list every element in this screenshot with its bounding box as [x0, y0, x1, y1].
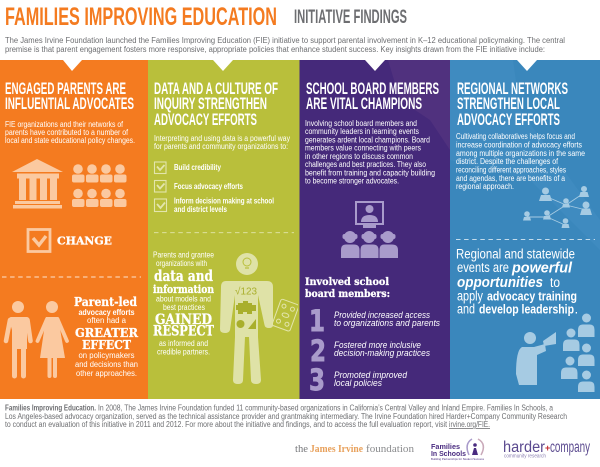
heading: data and inquiry — [154, 80, 278, 129]
list: numbered outcomes: 1 — [309, 304, 325, 338]
list: numbered outcomes — [309, 304, 440, 397]
text block: parent-led: on policymakers — [78, 351, 135, 360]
text block: parent-led: and decisions than — [75, 360, 138, 369]
text block: local champions: members value connecting with peers — [305, 144, 421, 152]
text block: powerful opportunities: events are — [457, 260, 509, 275]
heading: school board members — [306, 80, 439, 113]
list: numbered outcomes: local policies — [334, 378, 382, 388]
intro text — [5, 36, 565, 54]
icon: speaker with megaphone — [516, 332, 556, 385]
list: numbered outcomes: 3 — [309, 363, 325, 397]
checklist — [154, 162, 274, 214]
text block: powerful opportunities: Regional and statewide — [456, 246, 575, 262]
text block: local champions: generates ardent local champions. Board — [305, 136, 430, 144]
heading: regional networks — [457, 80, 568, 129]
logo: Harder+Company: harder — [503, 439, 545, 456]
text block: collaboratives: increase coordination of advocacy efforts — [456, 140, 582, 150]
text block: parent-led: GREATER — [75, 326, 139, 340]
heading: involved school board members: Involved school — [305, 276, 389, 288]
icon: man — [6, 301, 30, 376]
list: numbered outcomes: 2 — [310, 334, 326, 368]
text block: data and information: best practices — [163, 303, 205, 312]
text block: collaboratives — [456, 132, 586, 191]
text block: data and information: GAINED — [155, 312, 212, 328]
checklist: Focus advocacy efforts — [174, 182, 243, 191]
heading: engaged parents: ENGAGED PARENTS ARE — [5, 80, 126, 98]
logo: Families In Schools: Families — [431, 444, 460, 451]
text block: parent-led: EFFECT — [82, 338, 131, 352]
text block: powerful opportunities: powerful — [511, 260, 573, 276]
text block: collaboratives: district. Despite the challenges of — [456, 157, 559, 166]
text block: parent-led: often had a — [87, 316, 127, 325]
text block: policy changes: parents have contributed to a number of — [5, 128, 129, 137]
icon: audience — [561, 314, 594, 392]
logo: James Irvine Foundation: James Irvine — [310, 444, 363, 455]
text block: powerful opportunities: opportunities — [457, 274, 543, 291]
text block: data and information: about models and — [156, 294, 211, 304]
text block: data and information — [153, 250, 215, 356]
heading: involved school board members — [305, 276, 390, 300]
logo: Harder+Company — [503, 439, 590, 460]
checklist: and district levels — [174, 205, 227, 214]
footer text: Families Improving Education. — [5, 404, 96, 412]
heading: engaged parents: INFLUENTIAL ADVOCATES — [5, 95, 134, 113]
subtitle: INITIATIVE FINDINGS — [294, 7, 407, 28]
text block: data and information: data and — [154, 268, 213, 285]
text block: local champions: Involving school board members and — [305, 119, 417, 128]
icon: checkbox — [28, 230, 50, 252]
logo: Families In Schools: Building Partnerships for Student Success — [431, 458, 485, 461]
icon: person with data: √123 — [235, 286, 257, 298]
text block: local champions: benefit from training and capacity building — [305, 168, 435, 178]
text block: collaboratives: Cultivating collaboratives helps focus and — [456, 132, 575, 141]
text block: data and information: Parents and grantee — [153, 250, 215, 260]
heading: data and inquiry: DATA AND A CULTURE OF — [154, 80, 278, 98]
text block: local champions — [305, 119, 435, 186]
icon: network of people — [523, 186, 592, 228]
text block: collaboratives: regional approach. — [456, 182, 514, 191]
logo: Families In Schools: In Schools — [431, 451, 466, 458]
text block: powerful opportunities: develop leadership — [479, 302, 574, 316]
panel: school board members — [298, 60, 450, 399]
text block: powerful opportunities: to — [550, 275, 560, 290]
text block: policy changes — [5, 120, 135, 145]
heading: school board members: SCHOOL BOARD MEMBERS — [306, 80, 439, 98]
text block: data and information: as informed and — [159, 339, 208, 348]
text block: policy changes: local and state educational policy changes. — [5, 136, 135, 145]
icon: video conference — [341, 202, 398, 258]
text block: parent-led: advocacy efforts — [78, 308, 135, 317]
checklist: Build credibility — [174, 163, 221, 172]
checklist: Inform decision making at school — [174, 196, 274, 206]
heading: involved school board members: board members: — [305, 288, 390, 300]
icon: group of parents — [72, 164, 126, 207]
list: numbered outcomes: Promoted improved — [334, 370, 408, 380]
panel: engaged parents — [0, 60, 148, 399]
list: numbered outcomes: decision-making practices — [334, 348, 430, 358]
icon: person with data — [220, 253, 299, 384]
text block: local champions: challenges and best practices. They also — [305, 160, 427, 169]
text block: using data: for parents and community organizations to: — [154, 142, 288, 151]
text block: parent-led: other approaches. — [76, 369, 137, 378]
text block: powerful opportunities: and — [457, 302, 475, 316]
title: FAMILIES IMPROVING EDUCATION — [5, 3, 277, 31]
footer text: irvine.org/FIE. — [449, 420, 490, 429]
text block: powerful opportunities — [456, 246, 578, 316]
heading: data and inquiry: INQUIRY STRENGTHEN — [154, 95, 267, 113]
text block: collaboratives: and agendas, there are benefits of a — [456, 174, 566, 183]
text block: parent-led: Parent-led — [74, 295, 138, 309]
label: change: CHANGE — [57, 234, 112, 248]
icon: woman — [38, 301, 67, 376]
text block: parent-led — [74, 295, 139, 378]
text block: data and information: information — [153, 282, 214, 296]
intro text: The James Irvine Foundation launched the Families Improving Education (FIE) initiative to support parental involvement in K–12 educational policymaking. The central — [5, 36, 565, 45]
text block: using data: Interpreting and using data is a powerful way — [154, 134, 290, 143]
footer text: to conduct an evaluation of this initiative in 2011 and 2012. For more about the initiative and findings, and to access the full evaluation report, visit — [5, 420, 448, 429]
text block: local champions: in other regions to discuss common — [305, 152, 413, 161]
intro text: premise is that parent engagement fosters more responsive, appropriate policies that enhance student success. Key insights drawn from the FIE initiative include: — [5, 45, 545, 54]
text block: local champions: to become stronger advocates. — [305, 176, 399, 186]
panel: data and inquiry — [148, 60, 299, 399]
footer text — [5, 404, 567, 429]
list: numbered outcomes: to organizations and parents — [334, 318, 440, 328]
text block: powerful opportunities: . — [574, 302, 578, 316]
text block: collaboratives: among multiple organizations in the same — [456, 149, 586, 158]
text block: collaboratives: reconciling different approaches, styles — [456, 166, 566, 174]
text block: using data — [154, 134, 290, 151]
logo: James Irvine Foundation — [295, 444, 415, 455]
text block: powerful opportunities: advocacy training — [487, 288, 577, 304]
logo: James Irvine Foundation: foundation — [366, 444, 415, 455]
text block: policy changes: FIE organizations and their networks of — [5, 120, 124, 129]
text block: data and information: credible partners. — [157, 348, 210, 356]
icon: government building — [12, 159, 63, 208]
heading: data and inquiry: ADVOCACY EFFORTS — [154, 111, 257, 129]
text block: data and information: RESPECT — [153, 324, 214, 340]
text block: local champions: community leaders in learning events — [305, 127, 419, 136]
logo: Harder+Company: community research — [504, 454, 546, 460]
heading: school board members: ARE VITAL CHAMPIONS — [306, 95, 422, 113]
list: numbered outcomes: Provided increased access — [334, 310, 430, 320]
heading: engaged parents — [5, 80, 134, 113]
text block: data and information: organizations with — [156, 259, 207, 268]
panel: regional networks — [450, 60, 600, 399]
logo: Families In Schools — [431, 439, 485, 461]
list: numbered outcomes: Fostered more inclusive — [334, 340, 421, 350]
logo: Harder+Company: + — [545, 443, 550, 453]
text block: powerful opportunities: apply — [457, 288, 483, 304]
logo: James Irvine Foundation: the — [295, 444, 308, 455]
